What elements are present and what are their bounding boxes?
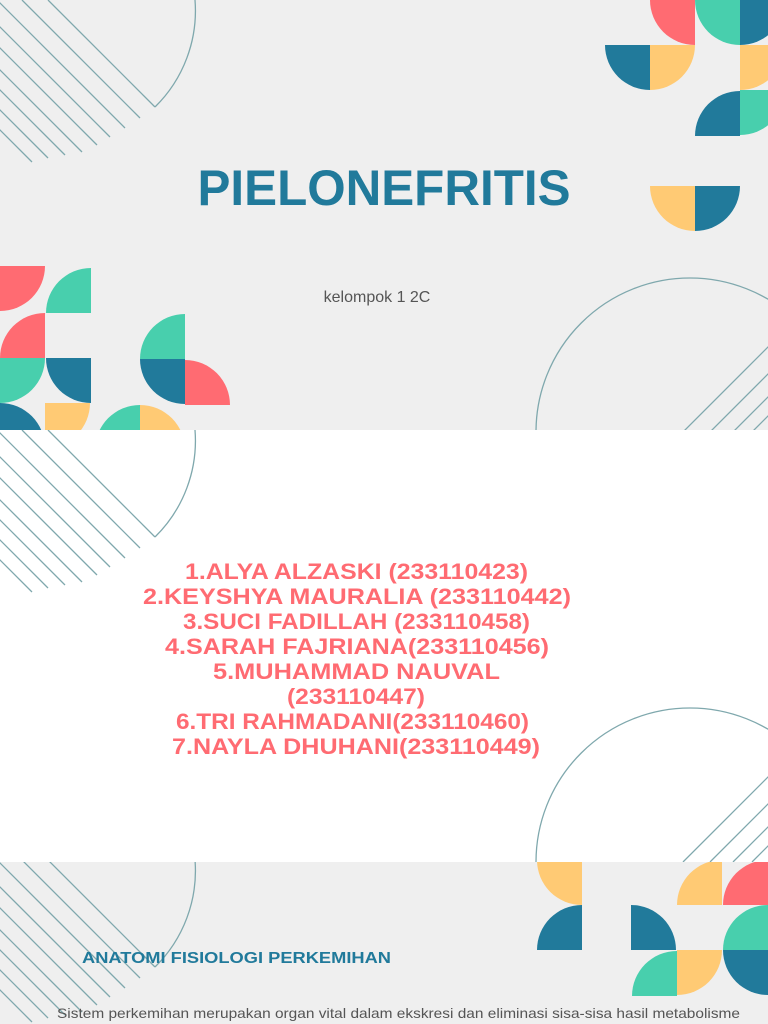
member list: 7.NAYLA DHUHANI(233110449) xyxy=(172,734,540,759)
subtitle: kelompok 1 2C xyxy=(324,289,430,306)
section: members background xyxy=(0,430,768,862)
shapes: bottom right cluster xyxy=(537,860,768,996)
section: cover background xyxy=(0,0,768,430)
member list: (233110447) xyxy=(287,684,425,709)
member list: 2.KEYSHYA MAURALIA (233110442) xyxy=(143,584,571,609)
shapes: top right cluster xyxy=(605,0,768,231)
member list: 4.SARAH FAJRIANA(233110456) xyxy=(165,634,549,659)
member list: 6.TRI RAHMADANI(233110460) xyxy=(176,709,529,734)
title: PIELONEFRITIS xyxy=(198,160,570,216)
member list: 3.SUCI FADILLAH (233110458) xyxy=(183,609,530,634)
member list: 5.MUHAMMAD NAUVAL xyxy=(213,659,500,684)
member list xyxy=(143,559,571,759)
shapes: left cluster xyxy=(0,266,230,430)
member list: 1.ALYA ALZASKI (233110423) xyxy=(185,559,528,584)
body text: Sistem perkemihan merupakan organ vital dalam ekskresi dan eliminasi sisa-sisa hasil metabolisme xyxy=(57,1005,740,1021)
section: anatomy background xyxy=(0,862,768,1024)
heading: anatomy: ANATOMI FISIOLOGI PERKEMIHAN xyxy=(82,950,391,967)
